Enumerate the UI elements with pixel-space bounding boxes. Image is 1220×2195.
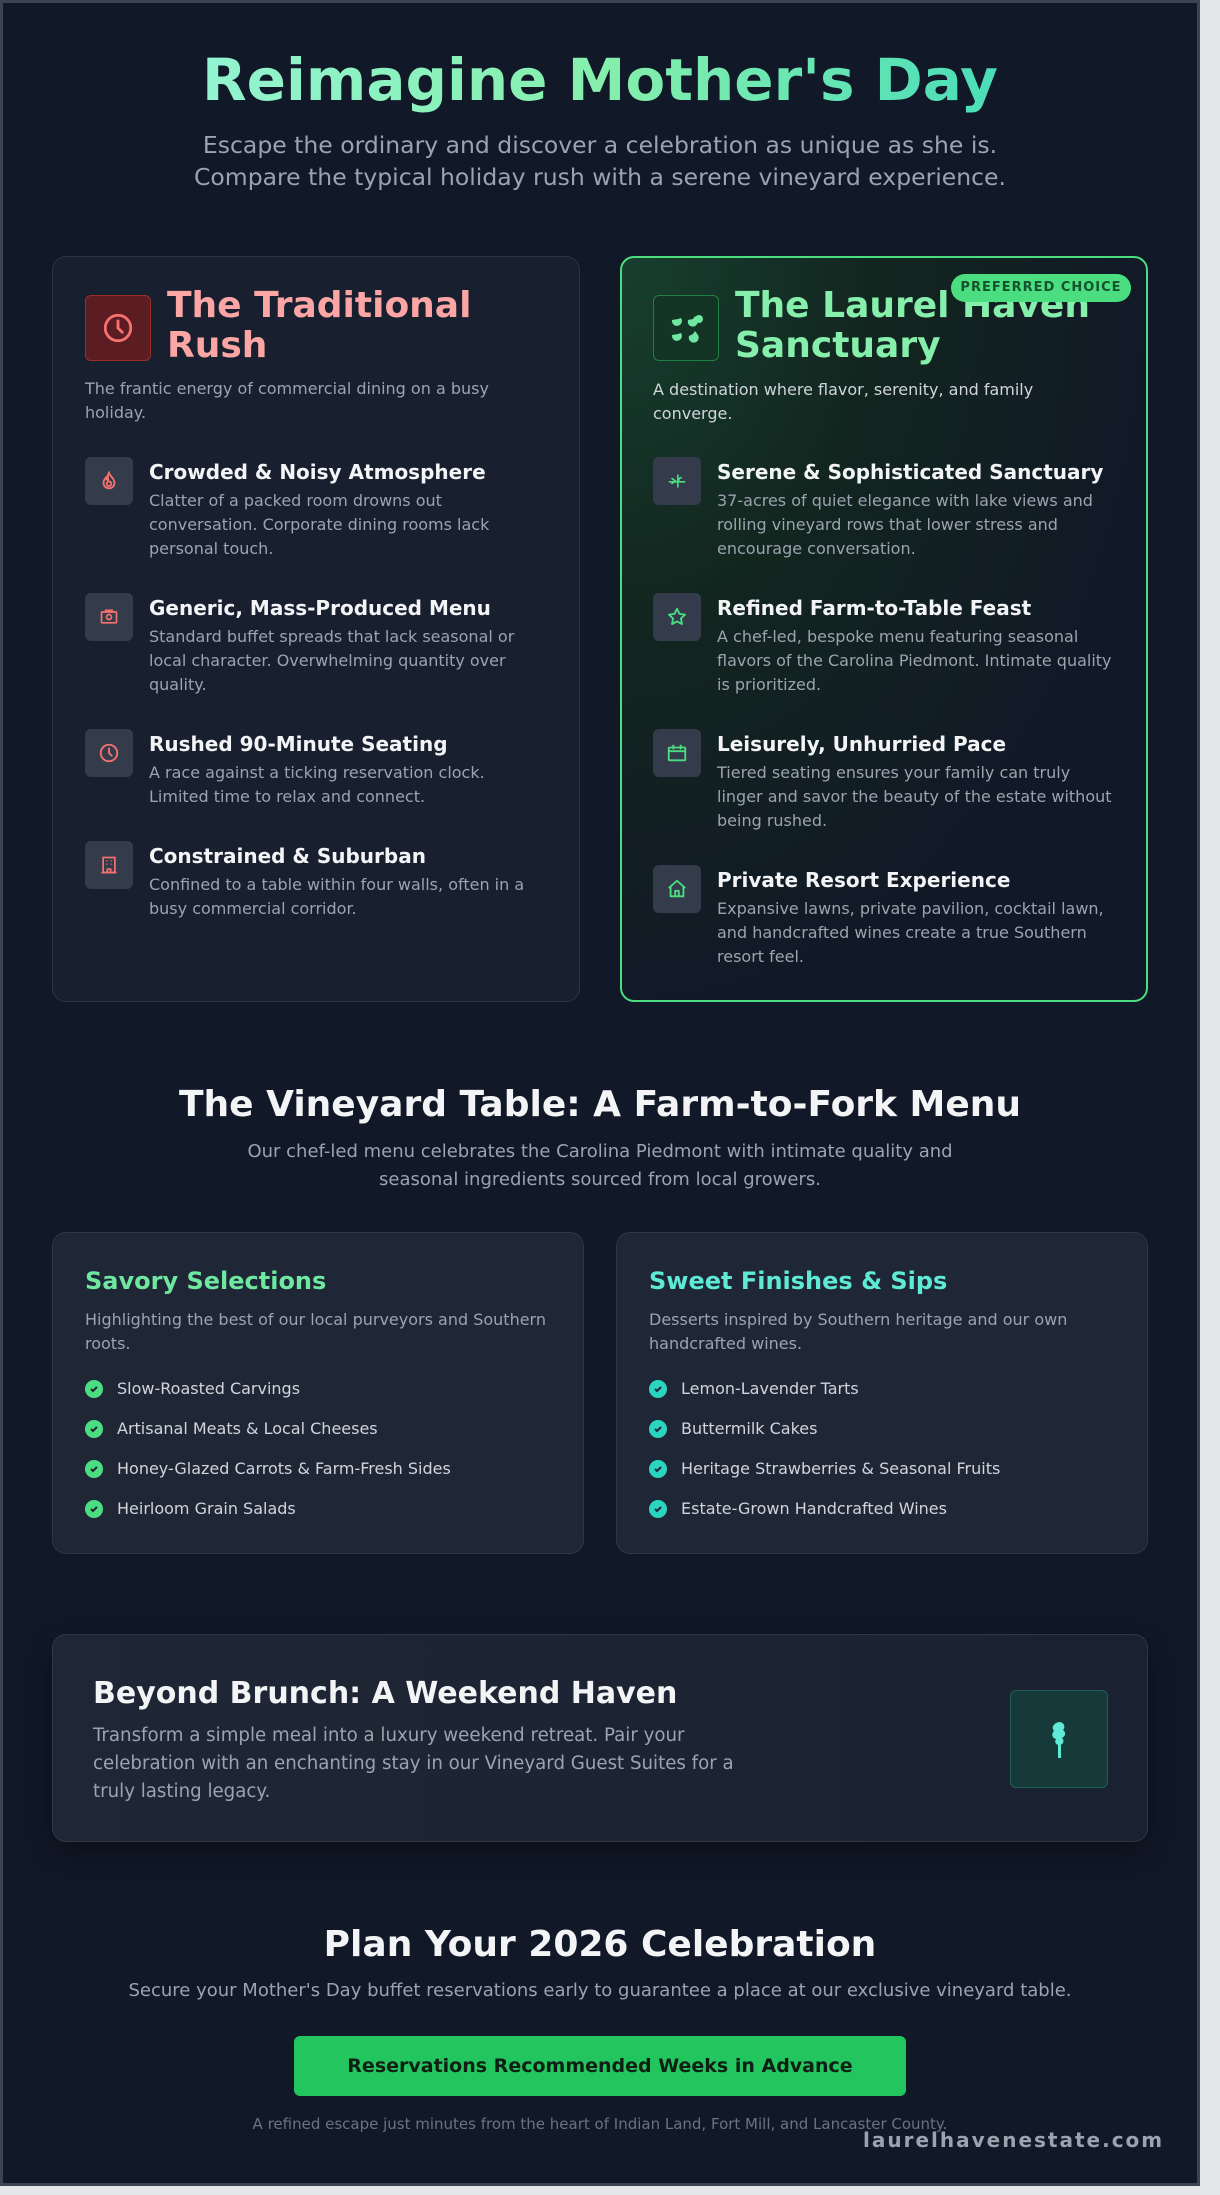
item: private resort: Expansive lawns, private pavilion, cocktail lawn, and handcrafted wines create a true Southern resort feel. (717, 899, 1104, 966)
text block: The frantic energy of commercial dining on a busy holiday. (85, 379, 489, 422)
panel: sweet finishes: Sweet Finishes & Sips (649, 1267, 947, 1295)
text block: menu intro: Our chef-led menu celebrates the Carolina Piedmont with intimate quality and (247, 1141, 953, 1162)
panel: savory selections: Artisanal Meats & Local Cheeses (117, 1419, 378, 1438)
badge: preferred choice (951, 274, 1131, 302)
heading: The Traditional (167, 285, 471, 326)
item: serene: Serene & Sophisticated Sanctuary (717, 460, 1103, 484)
subtitle: Compare the typical holiday rush with a serene vineyard experience. (194, 163, 1006, 191)
text block: plan: Secure your Mother's Day buffet reservations early to guarantee a place at our exclusive vineyard table. (128, 1980, 1072, 2001)
item: refined: Refined Farm-to-Table Feast (717, 596, 1031, 620)
item: leisurely: Leisurely, Unhurried Pace (717, 732, 1006, 756)
heading: Rush (167, 325, 267, 366)
heading: Sanctuary (735, 325, 941, 366)
icon: clock (85, 295, 151, 361)
icon: grapes (653, 295, 719, 361)
item: leisurely: Tiered seating ensures your family can truly linger and savor the beauty of the estate without being rushed. (717, 763, 1112, 830)
item: generic menu: Standard buffet spreads that lack seasonal or local character. Overwhelming quantity over quality. (149, 627, 514, 694)
panel: savory selections: Savory Selections (85, 1267, 326, 1295)
item: private resort (653, 865, 1104, 966)
icon: wine/grape (1010, 1690, 1108, 1788)
text block: A destination where flavor, serenity, and family converge. (653, 380, 1033, 423)
panel: sweet finishes (616, 1232, 1148, 1554)
heading (167, 285, 471, 366)
footer note: A refined escape just minutes from the heart of Indian Land, Fort Mill, and Lancaster County. (253, 2115, 947, 2133)
button: reservations: Reservations Recommended Weeks in Advance (347, 2055, 853, 2077)
item: refined: A chef-led, bespoke menu featuring seasonal flavors of the Carolina Piedmont. Intimate quality is prioritized. (717, 627, 1112, 694)
subtitle: Escape the ordinary and discover a celebration as unique as she is. (203, 131, 997, 159)
panel: sweet finishes: Estate-Grown Handcrafted Wines (681, 1499, 947, 1518)
item: crowded: Clatter of a packed room drowns out conversation. Corporate dining rooms lack personal touch. (149, 491, 489, 558)
heading: The Laurel Haven (735, 285, 1090, 326)
item: refined (653, 593, 1112, 694)
panel: sweet finishes: Buttermilk Cakes (681, 1419, 817, 1438)
item: serene (653, 457, 1103, 558)
heading: plan: Plan Your 2026 Celebration (324, 1924, 876, 1965)
item: rushed (85, 729, 485, 806)
item: rushed: A race against a ticking reservation clock. Limited time to relax and connect. (149, 763, 485, 806)
item: constrained (85, 841, 524, 918)
panel: sweet finishes: Heritage Strawberries & Seasonal Fruits (681, 1459, 1000, 1478)
panel: beyond brunch (52, 1634, 1148, 1842)
title: Reimagine Mother's Day (202, 46, 998, 114)
item: generic menu: Generic, Mass-Produced Menu (149, 596, 491, 620)
text block: Transform a simple meal into a luxury weekend retreat. Pair your celebration with an enchanting stay in our Vineyard Guest Suites for a truly lasting legacy. (93, 1725, 734, 1802)
badge: preferred choice: PREFERRED CHOICE (960, 280, 1122, 295)
panel: traditional rush (52, 256, 580, 1002)
panel: savory selections: Honey-Glazed Carrots & Farm-Fresh Sides (117, 1459, 451, 1478)
text block: menu intro: seasonal ingredients sourced from local growers. (379, 1169, 821, 1190)
heading: Beyond Brunch: A Weekend Haven (93, 1676, 677, 1711)
panel: savory selections: Slow-Roasted Carvings (117, 1379, 300, 1398)
text block: menu intro (247, 1141, 953, 1190)
panel: savory selections (52, 1232, 584, 1554)
item: constrained: Constrained & Suburban (149, 844, 426, 868)
subtitle (194, 131, 1006, 191)
heading (735, 285, 1090, 366)
item: crowded: Crowded & Noisy Atmosphere (149, 460, 486, 484)
item: leisurely (653, 729, 1112, 830)
item: generic menu (85, 593, 514, 694)
panel: sweet finishes: Desserts inspired by Southern heritage and our own handcrafted wines. (649, 1310, 1067, 1353)
item: rushed: Rushed 90-Minute Seating (149, 732, 448, 756)
watermark: laurelhavenestate.com (863, 2128, 1164, 2152)
item: constrained: Confined to a table within four walls, often in a busy commercial corridor. (149, 875, 524, 918)
panel: savory selections: Heirloom Grain Salads (117, 1499, 296, 1518)
panel: laurel haven sanctuary (620, 256, 1148, 1002)
panel: savory selections: Highlighting the best of our local purveyors and Southern roots. (85, 1310, 546, 1353)
panel: sweet finishes: Lemon-Lavender Tarts (681, 1379, 859, 1398)
item: serene: 37-acres of quiet elegance with lake views and rolling vineyard rows that lower stress and encourage conversation. (717, 491, 1093, 558)
item: crowded (85, 457, 490, 558)
item: private resort: Private Resort Experience (717, 868, 1010, 892)
button: reservations (294, 2036, 906, 2096)
heading: vineyard table: The Vineyard Table: A Farm-to-Fork Menu (179, 1084, 1021, 1125)
